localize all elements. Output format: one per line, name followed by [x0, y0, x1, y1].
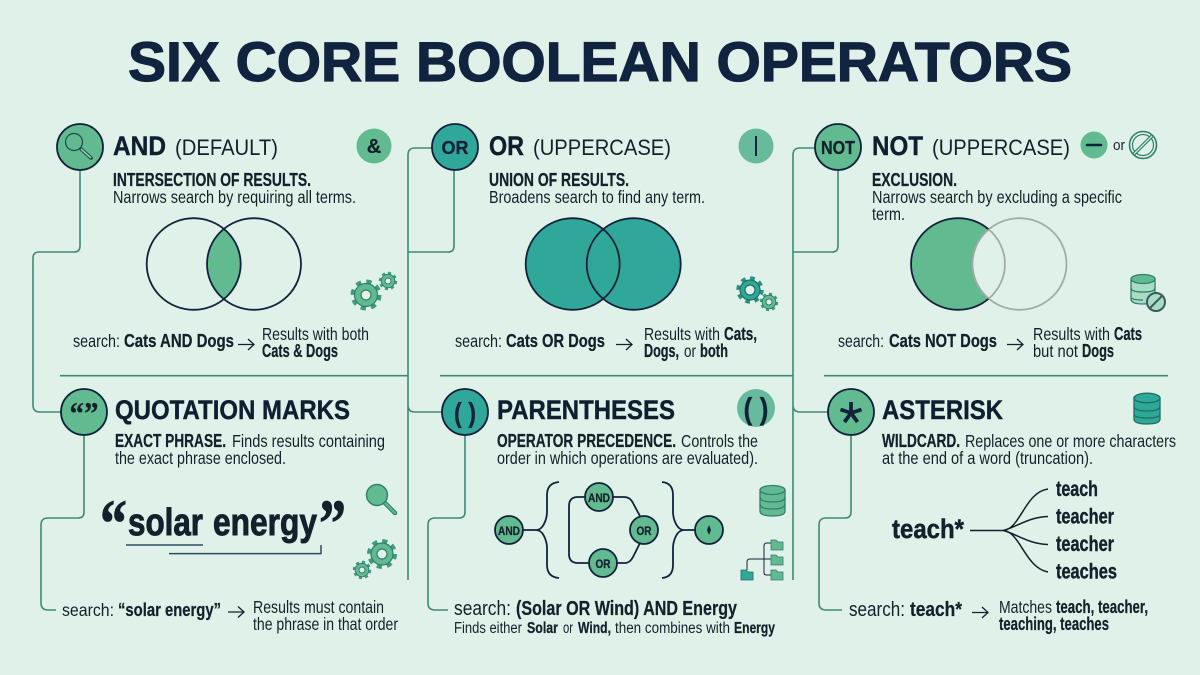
text: AND search example: search: [73, 331, 120, 351]
text: OR search example: search: [455, 331, 502, 351]
diagram: wildcard expansion [892, 478, 1117, 584]
text: parentheses search example: Solar [527, 620, 558, 637]
diagram: wildcard expansion: teacher [1056, 506, 1114, 528]
text: AND search example [73, 324, 369, 361]
text: parentheses description: OPERATOR PRECEDENCE. [497, 431, 676, 451]
panel: quotation marks [61, 389, 398, 634]
text: asterisk description: WILDCARD. [882, 431, 960, 451]
text: OR search example: Results with [644, 324, 720, 344]
text: quotation search example: Results must contain [253, 597, 384, 617]
text: parentheses description: order in which operations are evaluated). [497, 448, 758, 468]
icon: gears [738, 278, 777, 310]
heading: AND [113, 131, 278, 161]
heading: OR [489, 131, 671, 161]
connector: column two to NOT and asterisk [793, 148, 838, 580]
icon: gears [354, 542, 394, 578]
icon: database [1134, 393, 1160, 424]
heading: AND: (DEFAULT) [175, 135, 278, 160]
diagram: operator precedence flow: AND [588, 491, 610, 505]
text: OR description [489, 170, 705, 207]
text: asterisk description [882, 431, 1176, 468]
icon: quotes badge: “” [70, 395, 98, 431]
text: AND description: INTERSECTION OF RESULTS. [113, 170, 311, 190]
text: asterisk search example: teach* [910, 599, 962, 621]
text: AND description: Narrows search by requiring all terms. [113, 187, 356, 207]
icon: minus or prohibited: or [1113, 137, 1125, 154]
illustration: solar energy phrase [100, 485, 346, 561]
diagram: wildcard expansion: teaches [1056, 560, 1117, 584]
panel: NOT [815, 124, 1165, 361]
icon: NOT badge [815, 124, 861, 170]
icon: parentheses: ( ) [744, 391, 768, 426]
heading: parentheses: PARENTHESES [497, 395, 675, 425]
text: AND description [113, 170, 356, 207]
panel: asterisk [828, 389, 1176, 634]
panel: parentheses [442, 389, 785, 637]
icon: NOT badge: NOT [821, 138, 855, 158]
heading: NOT [872, 131, 1070, 161]
icon: database with prohibited sign [1131, 274, 1165, 311]
chart: OR venn diagram [526, 218, 681, 310]
heading: AND: AND [113, 131, 166, 161]
icon: quotes badge [61, 389, 107, 435]
text: OR description: Broadens search to find any term. [489, 187, 705, 207]
diagram: operator precedence flow [495, 482, 723, 578]
heading: asterisk: ASTERISK [882, 395, 1003, 425]
text: asterisk search example: Matches [999, 597, 1052, 617]
illustration: solar energy phrase: “ [100, 485, 127, 561]
icon: OR badge: OR [442, 138, 469, 158]
heading: NOT: (UPPERCASE) [932, 135, 1070, 160]
chart: NOT venn diagram [911, 218, 1066, 310]
text: quotation search example: “solar energy” [118, 600, 221, 620]
diagram: wildcard expansion: teach* [892, 514, 964, 544]
heading: OR: (UPPERCASE) [533, 135, 671, 160]
text: parentheses search example: Wind, [578, 620, 611, 637]
heading: quotation marks: QUOTATION MARKS [115, 395, 350, 425]
text: AND search example: Cats AND Dogs [124, 331, 234, 351]
text: OR search example [455, 324, 757, 361]
text: OR search example: or [684, 341, 696, 361]
text: quotation search example: the phrase in that order [253, 614, 398, 634]
text: OR search example: Cats OR Dogs [506, 331, 605, 351]
text: quotation search example: search: [62, 600, 114, 620]
icon: asterisk badge [828, 389, 874, 435]
icon: database [760, 486, 785, 516]
text: NOT search example [838, 324, 1142, 361]
text: quotation marks description: Finds results containing [232, 431, 385, 451]
title: SIX CORE BOOLEAN OPERATORS [128, 30, 1072, 93]
panel: AND [57, 124, 396, 361]
text: quotation search example [62, 597, 398, 634]
text: NOT search example: Cats [1114, 324, 1142, 344]
text: asterisk search example [849, 597, 1148, 634]
text: asterisk search example: teach, teacher, [1056, 597, 1148, 617]
text: NOT search example: Dogs [1082, 341, 1114, 361]
illustration: solar energy phrase: solar [128, 502, 203, 544]
illustration: solar energy phrase: energy [213, 502, 317, 544]
text: quotation marks description: EXACT PHRASE. [115, 431, 226, 451]
icon: parentheses badge: ( ) [454, 397, 476, 428]
connector: parentheses to search [428, 435, 465, 610]
text: NOT description: Narrows search by excluding a specific [872, 187, 1122, 207]
text: parentheses search example [454, 598, 775, 637]
text: quotation marks description [115, 431, 385, 468]
text: OR search example: Cats, [724, 324, 757, 344]
text: NOT search example: search: [838, 331, 884, 351]
text: quotation marks description: the exact phrase enclosed. [115, 448, 286, 468]
connector: asterisk to search [819, 435, 851, 610]
text: AND search example: Cats & Dogs [262, 341, 338, 361]
text: NOT search example: but not [1033, 341, 1078, 361]
diagram: wildcard expansion: teacher [1056, 533, 1114, 556]
text: asterisk search example: search: [849, 599, 905, 621]
diagram: operator precedence flow: AND [498, 524, 520, 538]
text: parentheses search example: Energy [734, 620, 775, 637]
icon: magnifier [366, 484, 395, 513]
text: OR description: UNION OF RESULTS. [489, 170, 629, 190]
heading: OR: OR [489, 131, 524, 161]
connector: column one to OR and parentheses [408, 148, 454, 580]
text: NOT description: EXCLUSION. [872, 170, 957, 190]
text: OR search example: both [700, 341, 728, 361]
icon: ampersand: & [367, 136, 381, 158]
diagram: operator precedence flow: OR [636, 524, 652, 538]
connector: AND to quotation marks [33, 170, 80, 412]
icon: parentheses badge [442, 389, 488, 435]
text: NOT description [872, 170, 1122, 224]
text: asterisk search example: teaching, teaches [999, 614, 1109, 634]
text: NOT search example: Cats NOT Dogs [889, 331, 997, 351]
text: NOT description: term. [872, 204, 905, 224]
text: parentheses description: Controls the [681, 431, 758, 451]
icon: magnifier badge [57, 124, 103, 170]
text: parentheses description [497, 431, 758, 468]
diagram: operator precedence flow: OR [596, 557, 611, 571]
icon: ampersand [356, 128, 392, 164]
text: OR search example: Dogs, [644, 341, 679, 361]
text: parentheses search example: or [563, 620, 573, 637]
chart: AND venn diagram [147, 218, 301, 310]
connector: quotation marks to search [41, 435, 84, 610]
text: parentheses search example: (Solar OR Wind) AND Energy [516, 598, 738, 620]
icon: OR badge [432, 124, 478, 170]
text: NOT search example: Results with [1033, 324, 1110, 344]
icon: minus or prohibited [1080, 132, 1156, 158]
text: parentheses search example: then combines with [615, 620, 730, 637]
text: parentheses search example: Finds either [454, 620, 522, 637]
text: asterisk description: at the end of a word (truncation). [882, 448, 1093, 468]
text: parentheses search example: search: [454, 598, 511, 620]
text: AND search example: Results with both [262, 324, 369, 344]
illustration: solar energy phrase: ” [319, 485, 346, 561]
heading: NOT: NOT [872, 131, 923, 161]
icon: pipe [738, 128, 774, 164]
panel: OR [432, 124, 777, 361]
icon: folder tree [741, 540, 783, 580]
icon: gears [353, 273, 396, 308]
diagram: wildcard expansion: teach [1056, 478, 1098, 501]
